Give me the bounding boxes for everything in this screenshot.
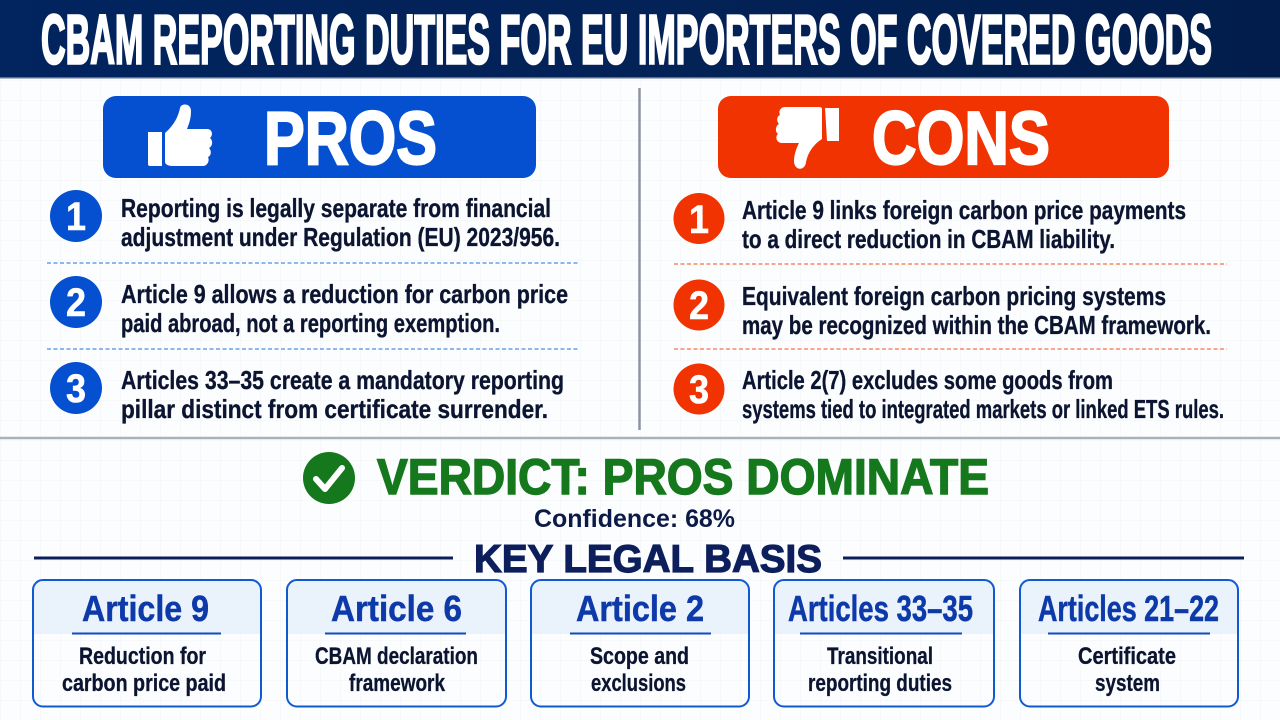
pros item 2: 2 — [66, 281, 86, 325]
card: Article 9: carbon price paid — [62, 670, 226, 697]
card: Articles 21-22 — [1020, 580, 1238, 706]
card: Article 6: CBAM declaration — [315, 643, 478, 670]
verdict heading: VERDICT: PROS DOMINATE — [377, 449, 989, 505]
pros item 3: pillar distinct from certificate surrender. — [121, 394, 548, 424]
card: Article 6: Article 6 — [331, 588, 462, 629]
panel: cons — [674, 96, 1227, 424]
title banner — [0, 0, 1280, 78]
confidence: Confidence: 68% — [534, 505, 735, 533]
card: Articles 21-22: Articles 21–22 — [1038, 588, 1219, 629]
cons item 2: 2 — [689, 284, 709, 328]
pros heading — [103, 96, 536, 180]
icon: check mark — [303, 452, 355, 504]
card: Article 2: Scope and — [590, 643, 689, 670]
cons item 3: 3 — [689, 368, 709, 412]
pros item 2 — [50, 276, 568, 338]
icon: thumbs up — [148, 105, 212, 166]
card: Article 6 — [287, 580, 506, 706]
card: Article 2: Article 2 — [576, 588, 704, 629]
card: Articles 33-35: reporting duties — [808, 670, 952, 697]
cons heading — [718, 96, 1169, 180]
cons item 1: 1 — [689, 198, 709, 242]
cons item 1 — [674, 193, 1186, 254]
pros item 3 — [50, 362, 564, 424]
cons item 3: Article 2(7) excludes some goods from — [742, 365, 1113, 395]
cons heading: CONS — [872, 96, 1050, 180]
cons item 3 — [674, 364, 1224, 424]
cons item 2 — [674, 280, 1211, 340]
card: Articles 33-35 — [774, 580, 994, 706]
card: Articles 33-35: Articles 33–35 — [788, 588, 973, 629]
card: Article 9: Article 9 — [82, 588, 209, 629]
cons item 2: Equivalent foreign carbon pricing systems — [742, 281, 1166, 311]
cons item 1: to a direct reduction in CBAM liability. — [742, 224, 1115, 254]
pros item 1: adjustment under Regulation (EU) 2023/956. — [121, 222, 560, 252]
pros item 1 — [50, 190, 560, 252]
icon: thumbs down — [776, 107, 839, 169]
key legal basis heading: KEY LEGAL BASIS — [474, 538, 822, 581]
verdict — [303, 449, 989, 533]
card: Article 6: framework — [349, 670, 446, 697]
card: Article 9 — [33, 580, 261, 706]
pros item 1: 1 — [66, 195, 86, 239]
card: Article 9: Reduction for — [79, 643, 206, 670]
pros item 2: Article 9 allows a reduction for carbon price — [121, 279, 568, 309]
card: Articles 33-35: Transitional — [827, 643, 933, 670]
pros heading: PROS — [264, 96, 437, 180]
card: Articles 21-22: Certificate — [1078, 643, 1176, 670]
pros item 2: paid abroad, not a reporting exemption. — [121, 308, 500, 338]
pros item 3: 3 — [66, 367, 86, 411]
pros item 3: Articles 33–35 create a mandatory reporting — [121, 365, 564, 395]
panel: pros — [47, 96, 580, 424]
card: Article 2: exclusions — [591, 670, 686, 697]
card: Article 2 — [531, 580, 749, 706]
card: Articles 21-22: system — [1095, 670, 1160, 697]
pros item 1: Reporting is legally separate from financial — [121, 193, 551, 223]
